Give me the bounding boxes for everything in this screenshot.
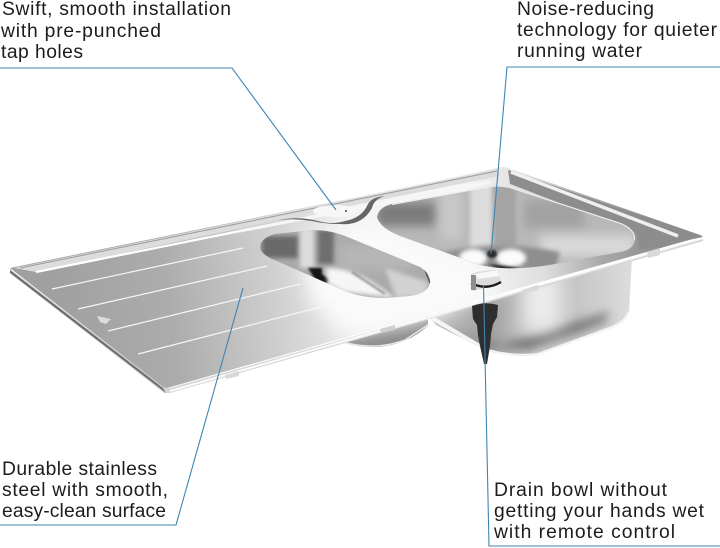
black waste pipe [472, 303, 498, 364]
text: drain bowl: with remote control [493, 522, 675, 543]
deck top surface [10, 167, 703, 388]
drainer grooves [52, 248, 340, 354]
text: durable stainless steel: Durable stainless [2, 459, 157, 480]
tap hole recess [278, 196, 385, 224]
text: drain bowl: getting your hands wet [494, 501, 705, 522]
text: durable stainless steel: easy-clean surface [2, 501, 166, 522]
text: drain bowl [493, 480, 705, 543]
large bowl interior [377, 186, 636, 268]
drain remote control and waste fitting [471, 270, 501, 364]
logo mark [97, 316, 111, 324]
right rim dark band and white strip [508, 170, 703, 250]
small bowl interior [260, 230, 430, 298]
text: swift installation: with pre-punched [0, 21, 161, 42]
remote control knob [471, 270, 501, 291]
large bowl outer wall [430, 262, 632, 356]
callout line: drain bowl [484, 285, 720, 546]
text: swift installation: tap holes [1, 42, 83, 63]
white centre between bowls [300, 222, 500, 335]
callout line: tap holes [0, 68, 336, 210]
sink deck [10, 167, 703, 393]
back rim band [14, 169, 500, 272]
text: drain bowl: Drain bowl without [494, 480, 668, 501]
deck front edge [10, 238, 703, 393]
text: noise-reducing: running water [517, 41, 643, 62]
text: durable stainless steel [2, 459, 168, 522]
text: noise-reducing: technology for quieter [517, 20, 718, 41]
sink underside bowls [344, 262, 632, 356]
small clips under deck [225, 371, 239, 379]
callout line: noise-reducing [491, 67, 720, 254]
callout line: surface [0, 288, 243, 525]
small bowl outer wall [340, 318, 428, 347]
text: noise-reducing [517, 0, 718, 62]
text: swift installation [0, 0, 231, 63]
text: durable stainless steel: steel with smooth, [2, 480, 168, 501]
